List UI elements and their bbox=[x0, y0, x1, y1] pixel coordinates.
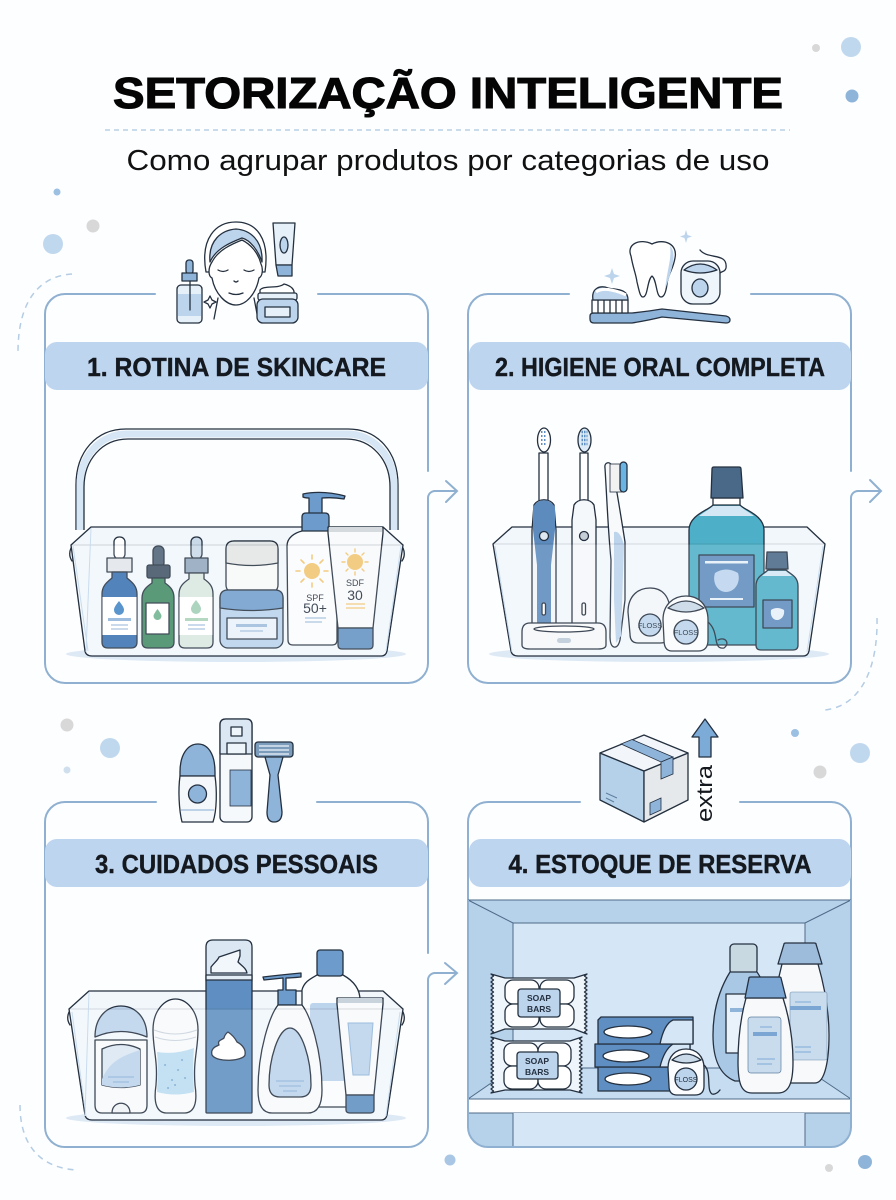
mouthwash bottle small bbox=[756, 552, 798, 650]
floss containers: FLOSS bbox=[638, 621, 662, 630]
tube: SPF 30 sunscreen: SDF bbox=[346, 578, 365, 588]
soap bars pack bottom: SOAP bbox=[525, 1056, 549, 1066]
deodorant stick bbox=[95, 1006, 147, 1113]
pump bottle bbox=[258, 973, 322, 1113]
bottle front bbox=[738, 977, 793, 1093]
floss containers bbox=[628, 588, 727, 651]
subtitle: Como agrupar produtos por categorias de uso bbox=[126, 145, 769, 177]
small tube bbox=[337, 998, 383, 1113]
header: reserve stock: 4. ESTOQUE DE RESERVA bbox=[508, 849, 812, 879]
arrow: to next bbox=[870, 480, 881, 502]
icon: roll-on, spray and razor bbox=[179, 719, 293, 822]
roll-on bbox=[153, 999, 198, 1113]
header: oral bbox=[469, 342, 851, 390]
soap bars pack top: SOAP bbox=[527, 993, 551, 1003]
basket: oral bbox=[489, 428, 829, 662]
header: personal care bbox=[45, 839, 428, 887]
back lotion bottle bbox=[302, 950, 360, 1107]
arrow to panel 4 bbox=[445, 963, 457, 984]
header: skincare: 1. ROTINA DE SKINCARE bbox=[87, 352, 386, 382]
mouthwash bottle large bbox=[689, 467, 764, 645]
soap bars pack bottom: BARS bbox=[525, 1067, 549, 1077]
icon: face and skincare products bbox=[177, 222, 298, 323]
shaving foam can bbox=[206, 940, 252, 1113]
bottle: blue serum bbox=[102, 537, 137, 648]
header: reserve stock bbox=[469, 839, 851, 887]
bottle: SPF 50+ sunscreen bbox=[287, 492, 345, 645]
bottle: SPF 50+ sunscreen: SPF bbox=[306, 593, 324, 603]
header: skincare bbox=[45, 342, 428, 390]
basket: skincare bbox=[66, 429, 406, 662]
panel: 3. cuidados pessoais bbox=[45, 719, 457, 1147]
bottle: pale serum bbox=[179, 537, 213, 648]
soap bars pack top: BARS bbox=[527, 1004, 551, 1014]
panel: 2. higiene oral completa bbox=[468, 230, 881, 683]
arrow to panel 2 bbox=[446, 481, 457, 502]
panel: 1. rotina de skincare bbox=[45, 222, 457, 683]
tube: SPF 30 sunscreen: 30 bbox=[347, 587, 363, 603]
panel: 4. estoque de reserva bbox=[468, 719, 851, 1147]
manual toothbrush bbox=[605, 462, 627, 647]
toothpaste boxes stack bbox=[595, 1017, 693, 1091]
floss containers: FLOSS bbox=[674, 628, 698, 637]
floss container: FLOSS bbox=[675, 1077, 698, 1084]
header: oral: 2. HIGIENE ORAL COMPLETA bbox=[495, 352, 825, 382]
soap bars pack bottom bbox=[491, 1037, 582, 1093]
soap bars pack top bbox=[491, 974, 587, 1034]
label: extra: extra bbox=[692, 764, 717, 822]
bottle: green serum bbox=[142, 546, 174, 648]
electric toothbrushes and base bbox=[522, 428, 606, 649]
title: SETORIZAÇÃO INTELIGENTE bbox=[113, 68, 783, 118]
header: personal care: 3. CUIDADOS PESSOAIS bbox=[95, 849, 378, 879]
bottle: SPF 50+ sunscreen: 50+ bbox=[303, 600, 327, 616]
cabinet shelf with reserve stock bbox=[468, 900, 851, 1147]
bottle back left bbox=[713, 944, 765, 1081]
tube: SPF 30 sunscreen bbox=[328, 527, 383, 649]
icon: tooth, floss and toothbrush bbox=[590, 230, 730, 323]
icon: box with up arrow and label extra bbox=[600, 719, 718, 822]
bottle back right bbox=[774, 943, 829, 1083]
basket: personal care bbox=[66, 940, 406, 1126]
floss container bbox=[668, 1049, 720, 1095]
jars bbox=[220, 541, 283, 648]
